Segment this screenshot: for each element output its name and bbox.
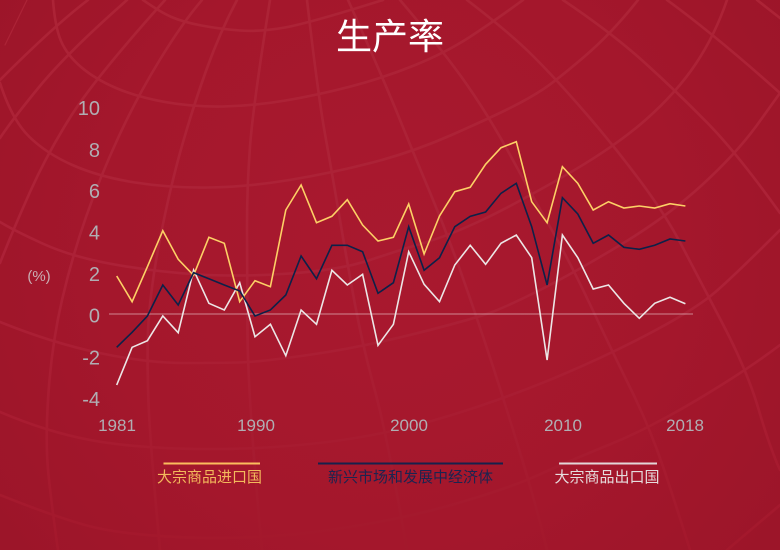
y axis unit label: (%) <box>27 268 51 285</box>
x axis tick labels: 1981 <box>98 416 136 435</box>
line: commodity importers <box>117 142 685 302</box>
x axis tick labels: 2018 <box>666 416 704 435</box>
y axis tick labels: 8 <box>89 140 100 162</box>
x axis tick labels: 2000 <box>390 416 428 435</box>
y axis tick labels <box>78 98 100 411</box>
line: emerging market and developing economies <box>117 183 685 347</box>
y axis tick labels: 2 <box>89 264 100 286</box>
line chart <box>117 142 685 385</box>
line: commodity exporters <box>117 235 685 385</box>
legend: commodity exporters: 大宗商品出口国 <box>554 468 660 486</box>
y axis tick labels: -2 <box>82 348 100 370</box>
legend: emerging market and developing economies: 新兴市场和发展中经济体 <box>328 469 493 486</box>
x axis tick labels: 2010 <box>544 416 582 435</box>
x axis tick labels <box>98 416 704 435</box>
y axis tick labels: 0 <box>89 306 100 328</box>
y axis tick labels: -4 <box>82 389 100 411</box>
legend: commodity importers: 大宗商品进口国 <box>157 468 262 486</box>
x axis tick labels: 1990 <box>237 416 275 435</box>
y axis tick labels: 6 <box>89 181 100 203</box>
title: 生产率 <box>336 16 444 57</box>
y axis tick labels: 10 <box>78 98 100 120</box>
zero baseline <box>109 313 693 315</box>
y axis tick labels: 4 <box>89 222 100 244</box>
